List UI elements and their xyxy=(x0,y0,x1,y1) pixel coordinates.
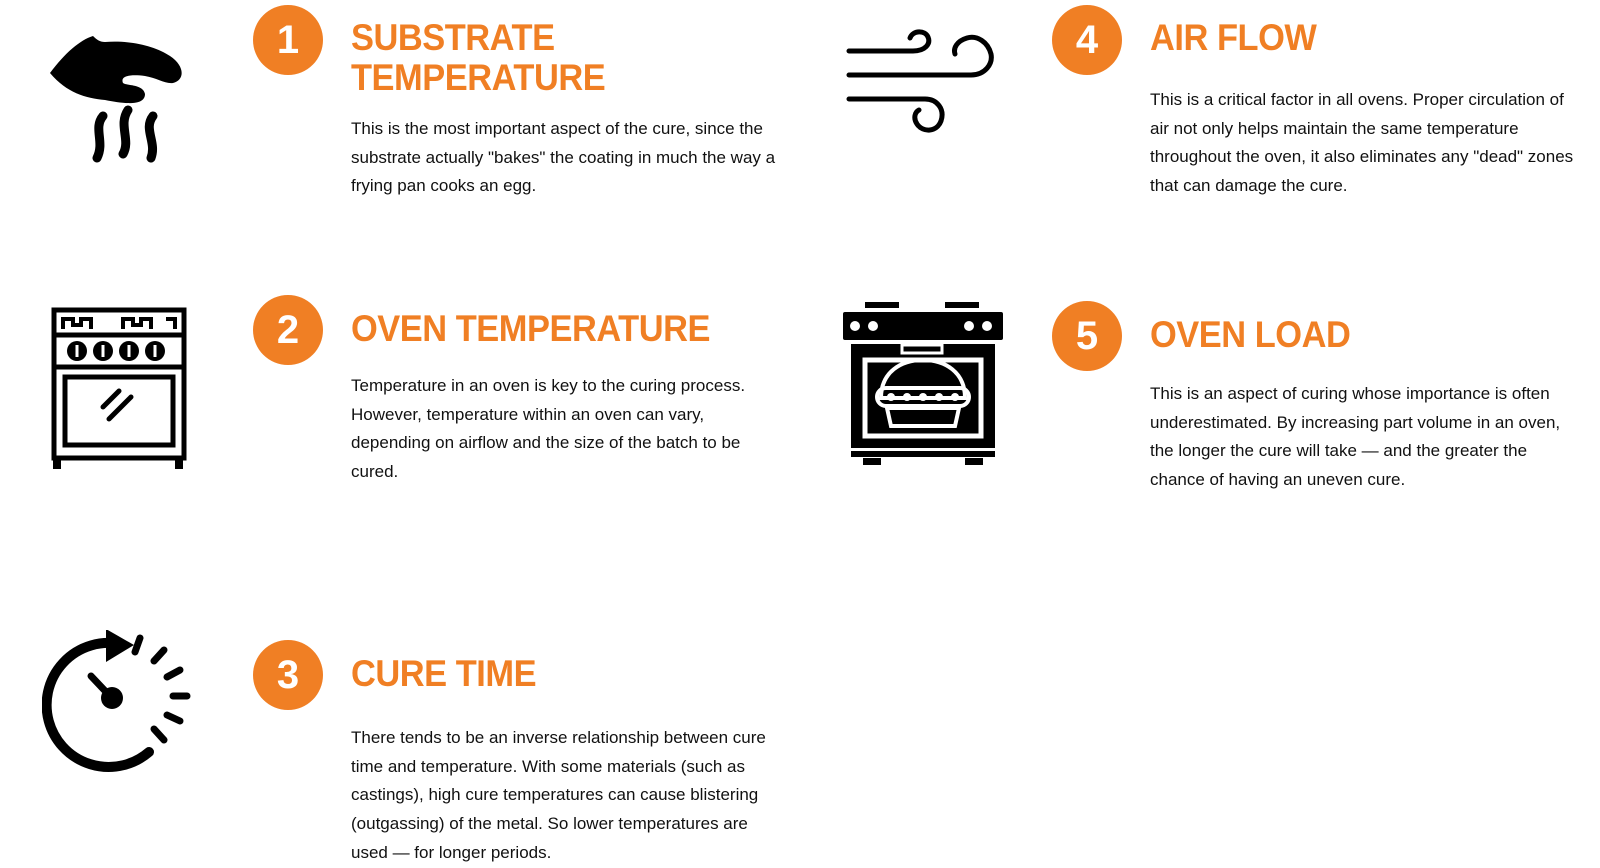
panel: 1 substrate temperature xyxy=(253,5,776,195)
body text: substrate actually "bakes" the coating in much the way a xyxy=(351,148,775,167)
body text: underestimated. By increasing part volume in an oven, xyxy=(1150,413,1560,432)
body text: This is the most important aspect of the cure, since the xyxy=(351,119,763,138)
panel: 2 oven temperature xyxy=(253,295,745,481)
body text: However, temperature within an oven can vary, xyxy=(351,405,704,424)
body text xyxy=(1150,384,1560,489)
number badge 1: 1 xyxy=(277,18,299,62)
body text: throughout the oven, it also eliminates any "dead" zones xyxy=(1150,147,1573,166)
body text: used — for longer periods. xyxy=(351,843,551,862)
number badge 4: 4 xyxy=(1076,18,1098,62)
body text: castings), high cure temperatures can cause blistering xyxy=(351,785,758,804)
heading: SUBSTRATE xyxy=(351,17,555,58)
body text: frying pan cooks an egg. xyxy=(351,176,536,195)
body text: This is an aspect of curing whose importance is often xyxy=(1150,384,1550,403)
body text: depending on airflow and the size of the batch to be xyxy=(351,433,740,452)
body text: the longer the cure will take — and the greater the xyxy=(1150,441,1527,460)
body text xyxy=(351,376,745,481)
heading: AIR FLOW xyxy=(1150,17,1316,58)
body text: time and temperature. With some materials (such as xyxy=(351,757,745,776)
panel: 3 cure time xyxy=(253,640,766,862)
number badge 5: 5 xyxy=(1076,314,1098,358)
body text: chance of having an uneven cure. xyxy=(1150,470,1405,489)
body text xyxy=(1150,90,1573,195)
body text xyxy=(351,728,766,862)
icon: stopwatch xyxy=(42,630,190,772)
body text: (outgassing) of the metal. So lower temperatures are xyxy=(351,814,748,833)
heading: OVEN LOAD xyxy=(1150,314,1350,355)
heading: OVEN TEMPERATURE xyxy=(351,308,710,349)
number badge 5 xyxy=(1052,301,1122,371)
body text: There tends to be an inverse relationship between cure xyxy=(351,728,766,747)
number badge 3 xyxy=(253,640,323,710)
number badge 1 xyxy=(253,5,323,75)
body text: air not only helps maintain the same temperature xyxy=(1150,119,1519,138)
number badge 2 xyxy=(253,295,323,365)
number badge 4 xyxy=(1052,5,1122,75)
number badge 2: 2 xyxy=(277,308,299,352)
body text xyxy=(351,119,776,195)
heading: CURE TIME xyxy=(351,653,536,694)
heading: TEMPERATURE xyxy=(351,57,605,98)
icon: wind xyxy=(846,29,994,133)
body text: Temperature in an oven is key to the curing process. xyxy=(351,376,745,395)
panel: 4 air flow xyxy=(1052,5,1573,195)
icon: hand with heat xyxy=(50,36,182,162)
body text: cured. xyxy=(351,462,398,481)
panel: 5 oven load xyxy=(1052,301,1560,489)
icon: loaded oven xyxy=(843,302,1003,465)
heading xyxy=(351,17,605,98)
icon: oven xyxy=(52,308,186,469)
number badge 3: 3 xyxy=(277,653,299,697)
body text: that can damage the cure. xyxy=(1150,176,1348,195)
body text: This is a critical factor in all ovens. Proper circulation of xyxy=(1150,90,1564,109)
